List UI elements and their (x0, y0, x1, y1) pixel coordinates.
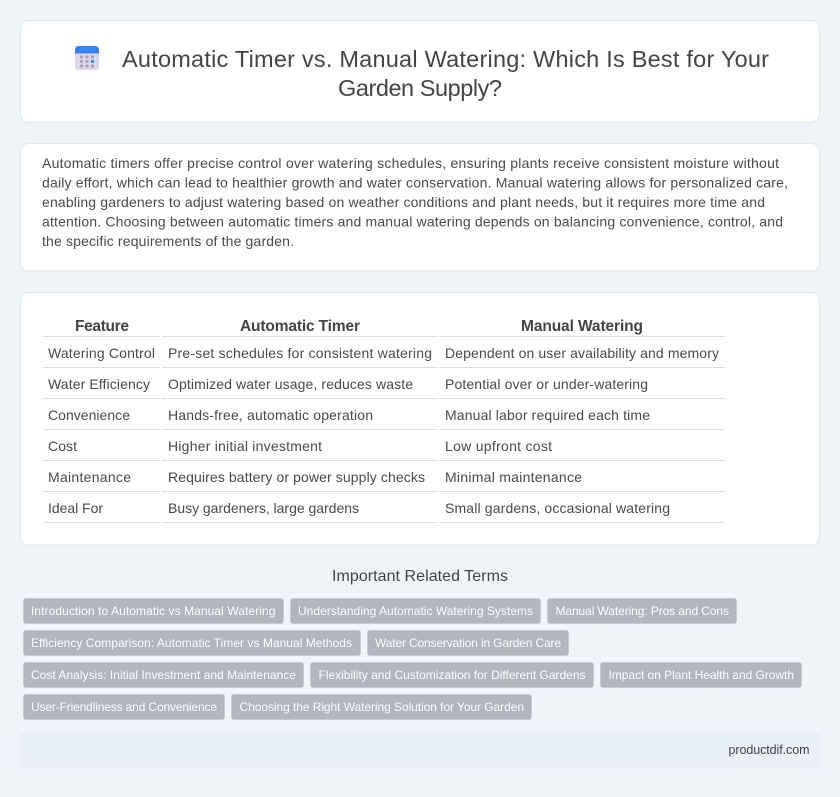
tag: Introduction to Automatic vs Manual Watering (31, 604, 276, 618)
tag (290, 598, 540, 624)
row: maintenance: Minimal maintenance (445, 469, 582, 485)
header panel (20, 20, 820, 122)
row: cost: Higher initial investment (168, 438, 322, 454)
title: Automatic Timer vs. Manual Watering: Which Is Best for Your (122, 46, 769, 72)
panel: introduction (20, 144, 820, 271)
tag: Understanding Automatic Watering Systems (298, 604, 533, 618)
text block: introduction (42, 155, 788, 249)
text block: introduction: enabling gardeners to adjust watering based on weather conditions and plant needs, but it requires more time and (42, 194, 765, 210)
tag: Cost Analysis: Initial Investment and Maintenance (31, 668, 296, 682)
tag: Impact on Plant Health and Growth (608, 668, 794, 682)
row: cost: Low upfront cost (445, 438, 552, 454)
tag (548, 598, 736, 624)
tag (24, 662, 304, 688)
text block: introduction: daily effort, which can lead to healthier growth and water conservation. Manual watering allows for personalized care, (42, 174, 788, 190)
row: watering control: Watering Control (48, 345, 155, 361)
text block: introduction: the specific requirements of the garden. (42, 233, 294, 249)
row: ideal for: Small gardens, occasional watering (445, 500, 670, 516)
text block: introduction: attention. Choosing between automatic timers and manual watering depends on balancing convenience, control, and (42, 214, 783, 230)
tag: Flexibility and Customization for Different Gardens (318, 668, 586, 682)
tag (310, 662, 594, 688)
tag: User-Friendliness and Convenience (31, 700, 217, 714)
table header: Feature (75, 318, 129, 335)
row: convenience (48, 407, 650, 423)
row: watering control: Dependent on user availability and memory (445, 345, 719, 361)
related term tags (24, 598, 802, 720)
row: watering control (48, 345, 719, 361)
footer: productdif.com (728, 743, 810, 757)
table header: Manual Watering (521, 318, 643, 335)
footer (20, 733, 820, 767)
heading: important related terms: Important Related Terms (332, 568, 508, 585)
row: maintenance (48, 469, 582, 485)
row: water efficiency: Optimized water usage, reduces waste (168, 376, 413, 392)
text block: introduction: Automatic timers offer precise control over watering schedules, ensuring plants receive consistent moisture without (42, 155, 779, 171)
table header (75, 318, 643, 335)
panel: comparison table (20, 292, 820, 545)
tag (24, 694, 224, 720)
tag: Efficiency Comparison: Automatic Timer vs Manual Methods (31, 636, 352, 650)
title (122, 46, 769, 101)
row: convenience: Convenience (48, 407, 130, 423)
icon: calendar (75, 46, 99, 70)
row: convenience: Manual labor required each time (445, 407, 650, 423)
row: ideal for: Ideal For (48, 500, 103, 516)
tag: Water Conservation in Garden Care (375, 636, 561, 650)
title: Garden Supply? (338, 75, 502, 101)
table header: Automatic Timer (240, 318, 360, 335)
tag: Choosing the Right Watering Solution for Your Garden (240, 700, 524, 714)
row: maintenance: Requires battery or power supply checks (168, 469, 425, 485)
row: convenience: Hands-free, automatic operation (168, 407, 373, 423)
tag (600, 662, 802, 688)
row: water efficiency (48, 376, 648, 392)
tag (232, 694, 532, 720)
row: maintenance: Maintenance (48, 469, 131, 485)
row: water efficiency: Potential over or under-watering (445, 376, 648, 392)
row: cost (48, 438, 552, 454)
tag (24, 598, 284, 624)
row: water efficiency: Water Efficiency (48, 376, 150, 392)
tag (368, 630, 568, 656)
tag (24, 630, 360, 656)
row: cost: Cost (48, 438, 77, 454)
row: ideal for: Busy gardeners, large gardens (168, 500, 359, 516)
tag: Manual Watering: Pros and Cons (556, 604, 729, 618)
row: watering control: Pre-set schedules for consistent watering (168, 345, 432, 361)
row: ideal for (48, 500, 670, 516)
